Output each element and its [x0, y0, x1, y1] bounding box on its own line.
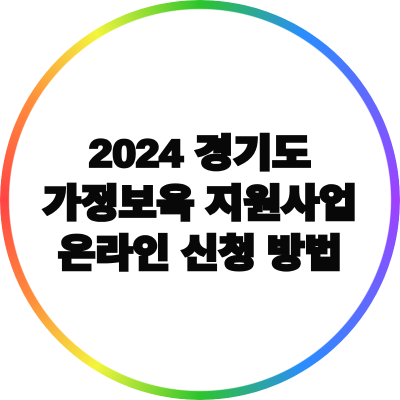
title line 3: 온라인 신청 방법 — [58, 234, 342, 276]
title line 2: 가정보육 지원사업 — [43, 184, 357, 226]
title line 1: 2024 경기도 — [89, 134, 311, 176]
